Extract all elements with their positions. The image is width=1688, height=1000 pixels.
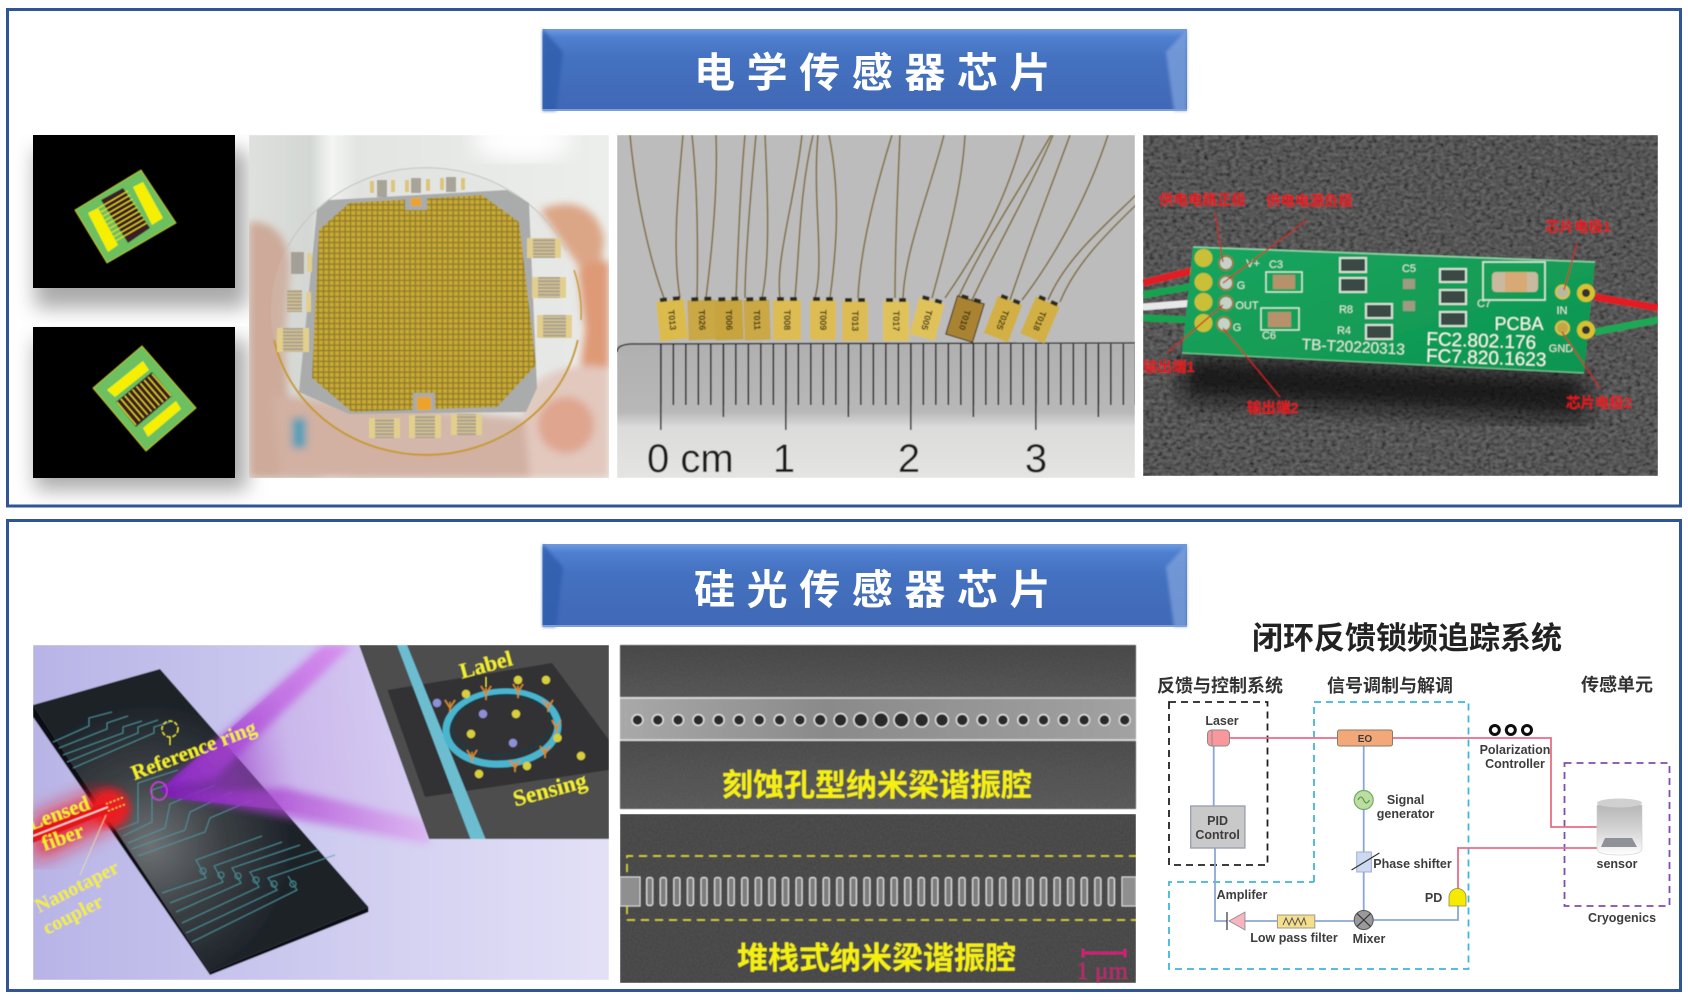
banner: 电学传感器芯片 — [542, 29, 1187, 111]
ruler ticks — [660, 344, 1136, 430]
dashed zone boxes — [1169, 702, 1670, 969]
EO modulator: EO — [1358, 734, 1372, 745]
laser: Laser — [1205, 714, 1239, 728]
photodetector — [1425, 888, 1466, 906]
caption: etched-hole cavity: 刻蚀孔型纳米梁谐振腔 — [722, 768, 1032, 803]
silkscreen labels: FC7.820.1623 — [1426, 346, 1547, 371]
gold chip packages: T025 — [994, 309, 1011, 331]
phase shifter — [1352, 852, 1452, 872]
image: stacked nanobeam cavity SEM — [620, 814, 1137, 985]
chip annotation labels: Label — [457, 645, 515, 684]
silkscreen labels: G — [1237, 280, 1245, 292]
red annotation labels — [1143, 192, 1632, 417]
silkscreen labels: PCBA — [1494, 314, 1544, 334]
red annotation labels: 芯片电极2 — [1566, 395, 1632, 412]
chip annotation labels: Sensing — [510, 768, 590, 811]
chip annotation labels: fiber — [38, 818, 87, 856]
ring markers and leader lines — [80, 677, 486, 875]
gold chip packages: T009 — [818, 310, 828, 330]
gold chip packages: T013 — [666, 309, 678, 331]
image: wafer held in gloved fingers — [249, 120, 609, 478]
image: packaged chips with gold wires over a ruler — [617, 135, 1136, 481]
top and bottom alignment pads — [372, 177, 463, 413]
EO modulator — [1338, 730, 1392, 746]
gold chip packages: T018 — [1031, 310, 1048, 332]
low pass filter — [1250, 915, 1338, 945]
silkscreen labels: G — [1233, 322, 1241, 334]
photonic chip body — [33, 669, 368, 975]
photodetector: PD — [1425, 891, 1442, 905]
gold chip packages: T005 — [919, 309, 934, 331]
cryogenic sensor — [1596, 798, 1642, 871]
antibody markers — [445, 684, 561, 772]
silkscreen labels: TB-T20220313 — [1301, 336, 1405, 359]
solder pads — [1194, 249, 1595, 339]
banner: 硅光传感器芯片: 硅光传感器芯片 — [694, 567, 1062, 613]
section headings — [1157, 675, 1653, 696]
section headings: 信号调制与解调 — [1327, 676, 1453, 696]
gold chip packages: T026 — [697, 310, 707, 330]
purple light cone — [160, 645, 429, 845]
ruler scale numbers: 2 — [898, 437, 920, 481]
ruler scale numbers: 1 — [773, 437, 795, 481]
etched holes — [632, 712, 1130, 728]
section headings: 传感单元 — [1581, 675, 1653, 695]
red optical lines — [1229, 738, 1597, 889]
cryogenics label: Cryogenics — [1588, 911, 1656, 925]
silkscreen labels: V+ — [1246, 258, 1260, 270]
silkscreen labels: OUT — [1235, 300, 1259, 312]
image: photonic chip with reference and sensing rings — [24, 645, 609, 980]
diagram title: 闭环反馈锁频追踪系统 — [1252, 621, 1562, 656]
red leader lines — [1167, 213, 1600, 397]
panel: electrical sensor chips — [8, 10, 1680, 506]
banner: 电学传感器芯片: 电学传感器芯片 — [694, 50, 1062, 96]
PID control box — [1191, 806, 1245, 848]
silkscreen labels: R4 — [1337, 325, 1351, 337]
waveguide traces — [53, 712, 335, 942]
comb electrode test pads — [277, 238, 572, 438]
silkscreen labels: C3 — [1269, 259, 1283, 271]
signal generator: generator — [1377, 807, 1435, 821]
yellow and purple particles — [433, 676, 585, 778]
gold chip packages: T008 — [782, 310, 792, 330]
icon: chip layout two — [93, 346, 196, 451]
ruler scale numbers: 0 cm — [647, 437, 734, 481]
mixer — [1353, 910, 1385, 946]
blue electrical lines — [1214, 746, 1458, 921]
SMD components — [1261, 258, 1545, 339]
inset: sensing ring close-up — [359, 645, 609, 839]
gold chip packages: T017 — [891, 311, 901, 331]
optical fiber with red glow — [33, 788, 130, 862]
silkscreen labels: GND — [1549, 343, 1573, 355]
phase shifter: Phase shifter — [1373, 857, 1452, 871]
ruler scale numbers: 3 — [1025, 437, 1047, 481]
section headings: 反馈与控制系统 — [1157, 675, 1283, 696]
caption: stacked cavity: 堆栈式纳米梁谐振腔 — [737, 941, 1016, 976]
red annotation labels: 输出端2 — [1247, 399, 1299, 417]
silkscreen labels: C6 — [1262, 330, 1276, 342]
amplifier: Amplifer — [1217, 888, 1267, 902]
silkscreen labels: FC2.802.176 — [1426, 329, 1536, 354]
banner: 硅光传感器芯片 — [542, 544, 1187, 627]
gold chip packages — [656, 293, 1061, 343]
polarization controller — [1480, 726, 1550, 771]
signal generator: Signal — [1387, 793, 1424, 807]
PID control box: PID — [1207, 814, 1228, 828]
cryogenic sensor: sensor — [1596, 857, 1638, 871]
scale bar 1 μm: 1 μm — [1076, 958, 1128, 985]
chip annotation labels: Lensed — [24, 791, 93, 835]
lead wires — [1143, 270, 1658, 332]
chip annotation labels: Nanotaper — [31, 856, 123, 917]
ruler scale numbers — [648, 444, 1046, 474]
chip annotation labels: coupler — [39, 891, 107, 939]
panel: silicon photonic sensor chips — [8, 520, 1680, 990]
silkscreen labels: C5 — [1402, 263, 1416, 275]
red annotation labels: 供电电源负极 — [1266, 193, 1353, 210]
image: green PCB readout board with red annotations — [1143, 135, 1658, 476]
polarization controller: Controller — [1485, 757, 1545, 771]
gold chip packages: T011 — [752, 310, 762, 330]
red annotation labels: 芯片电极1 — [1545, 219, 1611, 236]
PID control box: Control — [1195, 828, 1240, 842]
stacked bars — [620, 877, 1136, 906]
gold chip packages: T006 — [724, 310, 734, 330]
gold chip packages: T013 — [850, 311, 860, 331]
diagram: closed-loop feedback frequency-locking tracking system — [1157, 621, 1670, 969]
image: etched-hole nanobeam cavity SEM — [620, 645, 1136, 809]
polarization controller: Polarization — [1480, 743, 1550, 757]
red annotation labels: 供电电路正极 — [1159, 192, 1246, 209]
low pass filter: Low pass filter — [1250, 931, 1338, 945]
chip annotation labels: Reference ring — [128, 715, 260, 785]
mixer: Mixer — [1353, 932, 1385, 946]
silkscreen labels: C7 — [1477, 298, 1491, 310]
silkscreen labels: R8 — [1339, 304, 1353, 316]
silkscreen labels: IN — [1556, 305, 1568, 317]
gold wires — [630, 135, 1136, 302]
laser — [1205, 714, 1239, 746]
signal generator — [1354, 790, 1435, 821]
chip annotation labels — [24, 645, 590, 939]
gold chip packages: T010 — [957, 309, 972, 331]
icon: chip layout one — [75, 170, 176, 263]
amplifier — [1217, 888, 1267, 930]
silkscreen labels — [1233, 258, 1573, 371]
image: interdigitated chip layouts on black — [33, 135, 247, 490]
red annotation labels: 输出端1 — [1143, 358, 1195, 376]
